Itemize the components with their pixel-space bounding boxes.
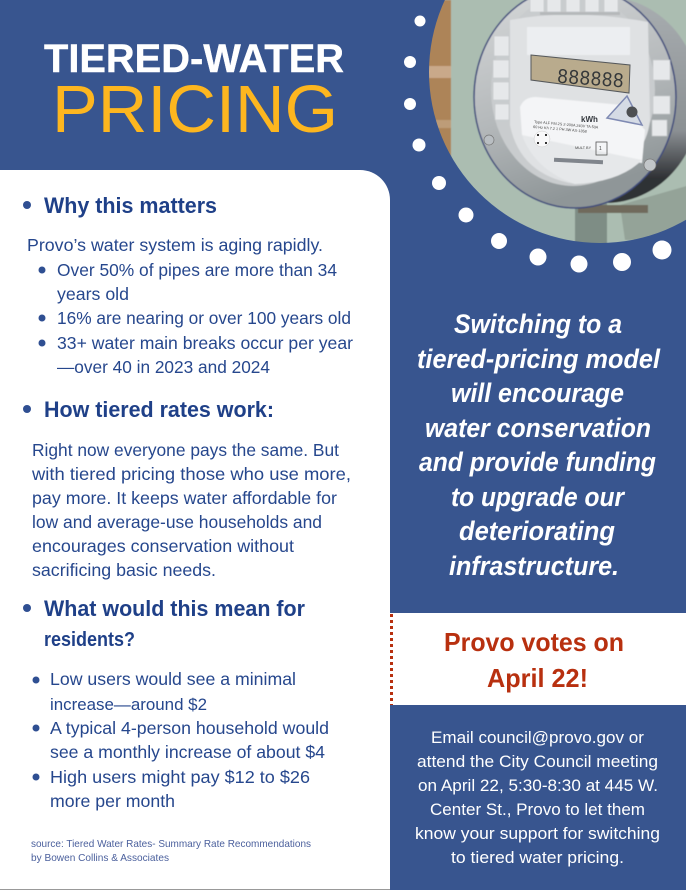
call to action text: Email council@provo.gov or (431, 729, 645, 747)
callout: switching to tiered pricing: and provide funding (419, 447, 656, 477)
section: why this matters: 16% are nearing or over 100 years old (57, 308, 351, 328)
title: TIERED-WATER (44, 37, 344, 81)
section: what this means for residents: increase—around $2 (50, 696, 207, 714)
section: what this means for residents: A typical 4-person household would (50, 718, 329, 738)
photo: electric meter in circle (425, 0, 686, 250)
call to action text: to tiered water pricing. (451, 849, 624, 867)
section: how tiered rates work: pay more. It keeps water affordable for (32, 488, 337, 508)
section: how tiered rates work: low and average-use households and (32, 512, 322, 532)
section: why this matters: —over 40 in 2023 and 2024 (57, 357, 270, 377)
meter label text: MULT BY (575, 146, 592, 150)
callout: switching to tiered pricing: infrastructure. (449, 551, 619, 581)
section: how tiered rates work: with tiered pricing those who use more, (31, 464, 351, 484)
section: why this matters: 33+ water main breaks occur per year (57, 333, 353, 353)
title: PRICING (52, 72, 338, 147)
callout: switching to tiered pricing: water conservation (425, 413, 651, 443)
meter label text: 1 (599, 146, 602, 152)
section: how tiered rates work: Right now everyone pays the same. But (32, 440, 339, 460)
section: what this means for residents: more per month (50, 791, 175, 811)
section: why this matters: Why this matters (44, 193, 217, 218)
call to action text: attend the City Council meeting (417, 753, 658, 771)
call to action text: Center St., Provo to let them (430, 801, 645, 819)
section: how tiered rates work: sacrificing basic needs. (32, 560, 216, 580)
call to action text: know your support for switching (415, 825, 660, 843)
meter label text: kWh (581, 115, 598, 124)
section: why this matters: years old (57, 284, 129, 304)
source note: by Bowen Collins & Associates (31, 852, 169, 864)
section: why this matters (23, 193, 353, 377)
meter LCD display (531, 55, 630, 94)
title (44, 37, 344, 147)
callout: switching to tiered pricing: will encourage (451, 378, 624, 408)
section: what this means for residents: residents? (44, 629, 135, 651)
panel: vote date banner: Provo votes on (444, 627, 624, 657)
decorative dot arc (404, 16, 672, 272)
meter label text (533, 115, 607, 155)
meter LCD display: 888888 (556, 67, 625, 94)
callout: switching to tiered pricing: Switching to a (454, 309, 622, 339)
panel: vote date banner (390, 613, 686, 705)
panel: vote date banner: April 22! (487, 663, 588, 693)
callout: switching to tiered pricing: deteriorating (459, 516, 615, 546)
section: what this means for residents: see a monthly increase of about $4 (50, 742, 325, 762)
panel: white content column (0, 170, 390, 890)
section: why this matters: Provo’s water system is aging rapidly. (27, 235, 323, 255)
section: what this means for residents: Low users would see a minimal (50, 669, 296, 689)
section: what this means for residents (23, 596, 329, 811)
meter label text: 60 Hz Kh 7.2 1 PH 3W AS-1358 (533, 125, 587, 134)
section: why this matters: Over 50% of pipes are more than 34 (57, 260, 337, 280)
meter label text: Type ALF FM 2S 2-200A 240V TA 50A (534, 120, 599, 130)
section: how tiered rates work: How tiered rates work: (44, 397, 274, 422)
section: what this means for residents: What would this mean for (44, 596, 305, 621)
section: how tiered rates work (23, 397, 351, 580)
call to action text (415, 729, 660, 867)
section: what this means for residents: High users might pay $12 to $26 (50, 767, 310, 787)
callout: switching to tiered pricing (417, 309, 660, 581)
source note: source: Tiered Water Rates- Summary Rate Recommendations (31, 838, 311, 850)
source note (31, 838, 311, 864)
call to action text: on April 22, 5:30-8:30 at 445 W. (418, 777, 658, 795)
callout: switching to tiered pricing: tiered-pricing model (417, 344, 660, 374)
section: how tiered rates work: encourages conservation without (32, 536, 294, 556)
callout: switching to tiered pricing: to upgrade our (451, 482, 625, 512)
